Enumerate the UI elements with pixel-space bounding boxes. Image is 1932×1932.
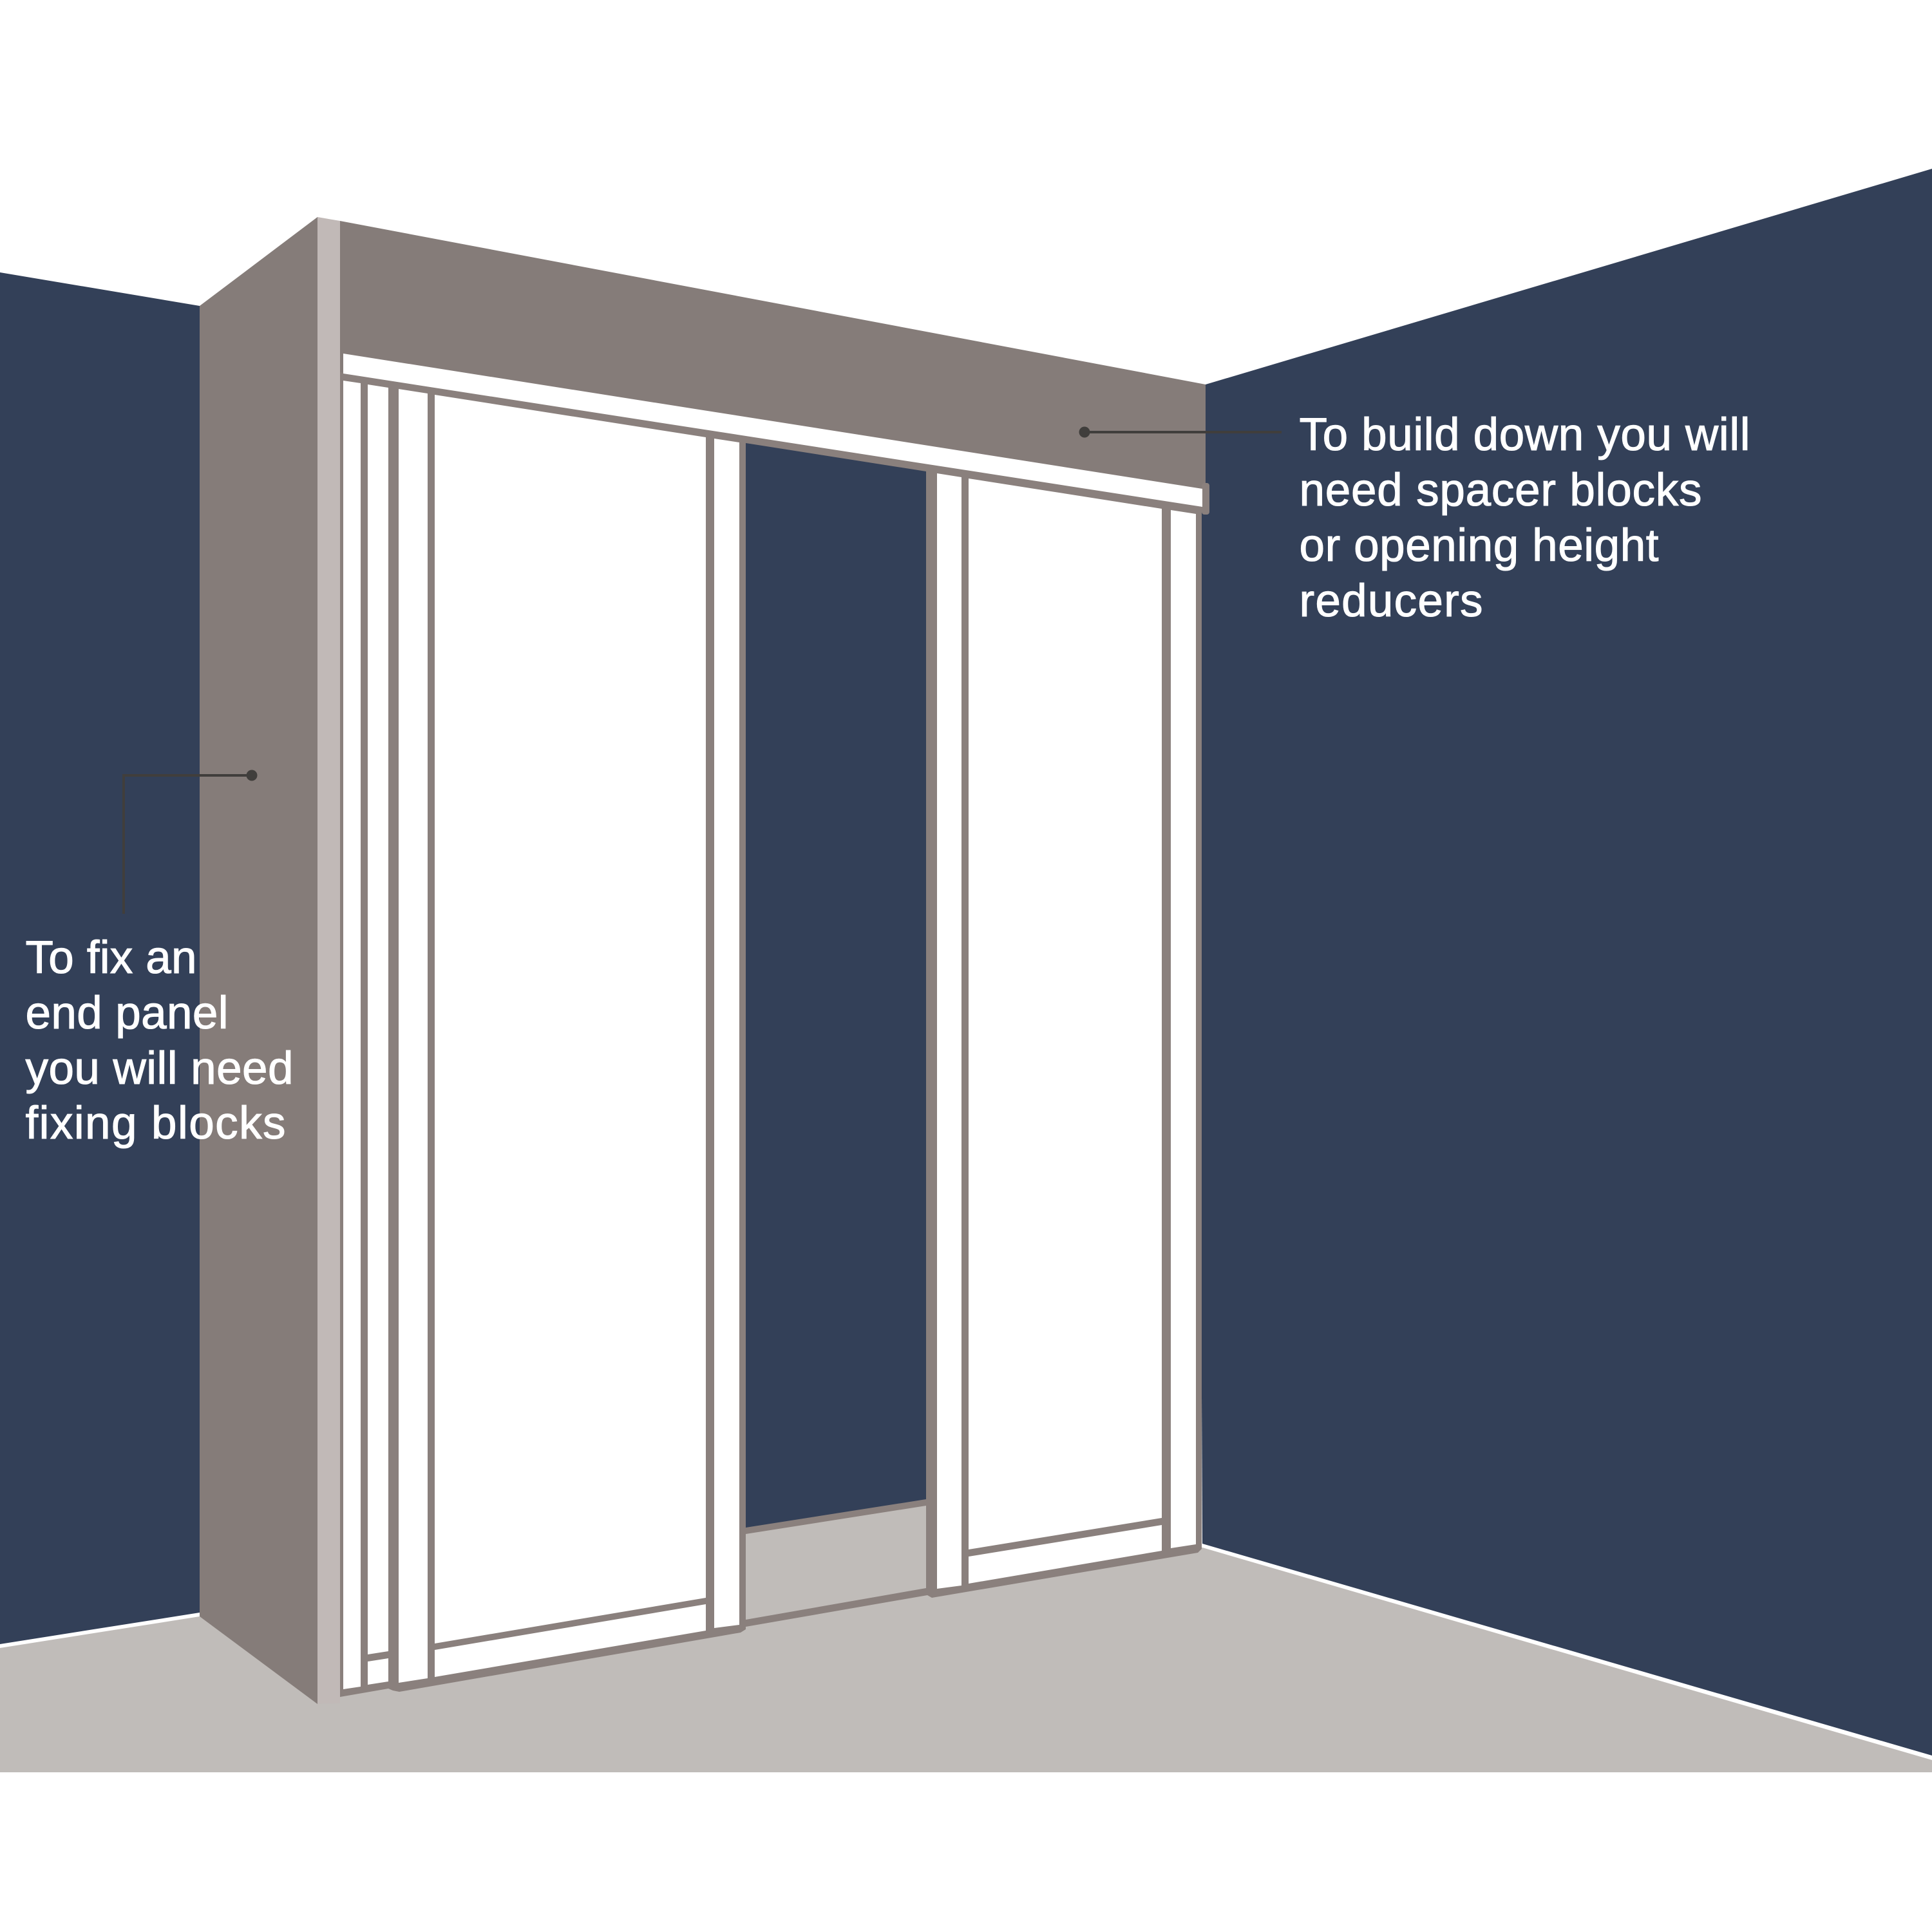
top track end cap — [1202, 483, 1209, 515]
frame backing — [340, 372, 1202, 1697]
leader: build down — [1079, 426, 1282, 438]
callout: end panel: fixing blocks — [26, 1098, 286, 1149]
callout: build down: or opening height — [1300, 520, 1659, 571]
right door slices — [937, 473, 1196, 1589]
opening: wall seen through gap — [746, 443, 926, 1528]
leader: end panel — [124, 770, 258, 914]
callout: build down: need spacer blocks — [1300, 465, 1701, 516]
build-down header — [340, 221, 1206, 499]
top track — [343, 354, 1202, 507]
wardrobe door frames — [340, 372, 1202, 1697]
callout: build down: To build down you will — [1300, 410, 1750, 460]
floor — [0, 1481, 1932, 1772]
opening: floor seen through gap — [746, 1506, 926, 1620]
callout: build down: reducers — [1300, 576, 1482, 627]
right wall — [1198, 169, 1932, 1756]
end panel front edge — [317, 217, 340, 1704]
callout: end panel — [26, 933, 294, 1149]
callout: end panel: end panel — [26, 988, 228, 1039]
left door slices — [343, 381, 739, 1689]
callout: build down — [1300, 410, 1750, 627]
callout: end panel: To fix an — [26, 933, 197, 983]
callout: end panel: you will need — [26, 1043, 294, 1094]
left wall — [0, 272, 200, 1644]
end panel side — [200, 217, 317, 1704]
